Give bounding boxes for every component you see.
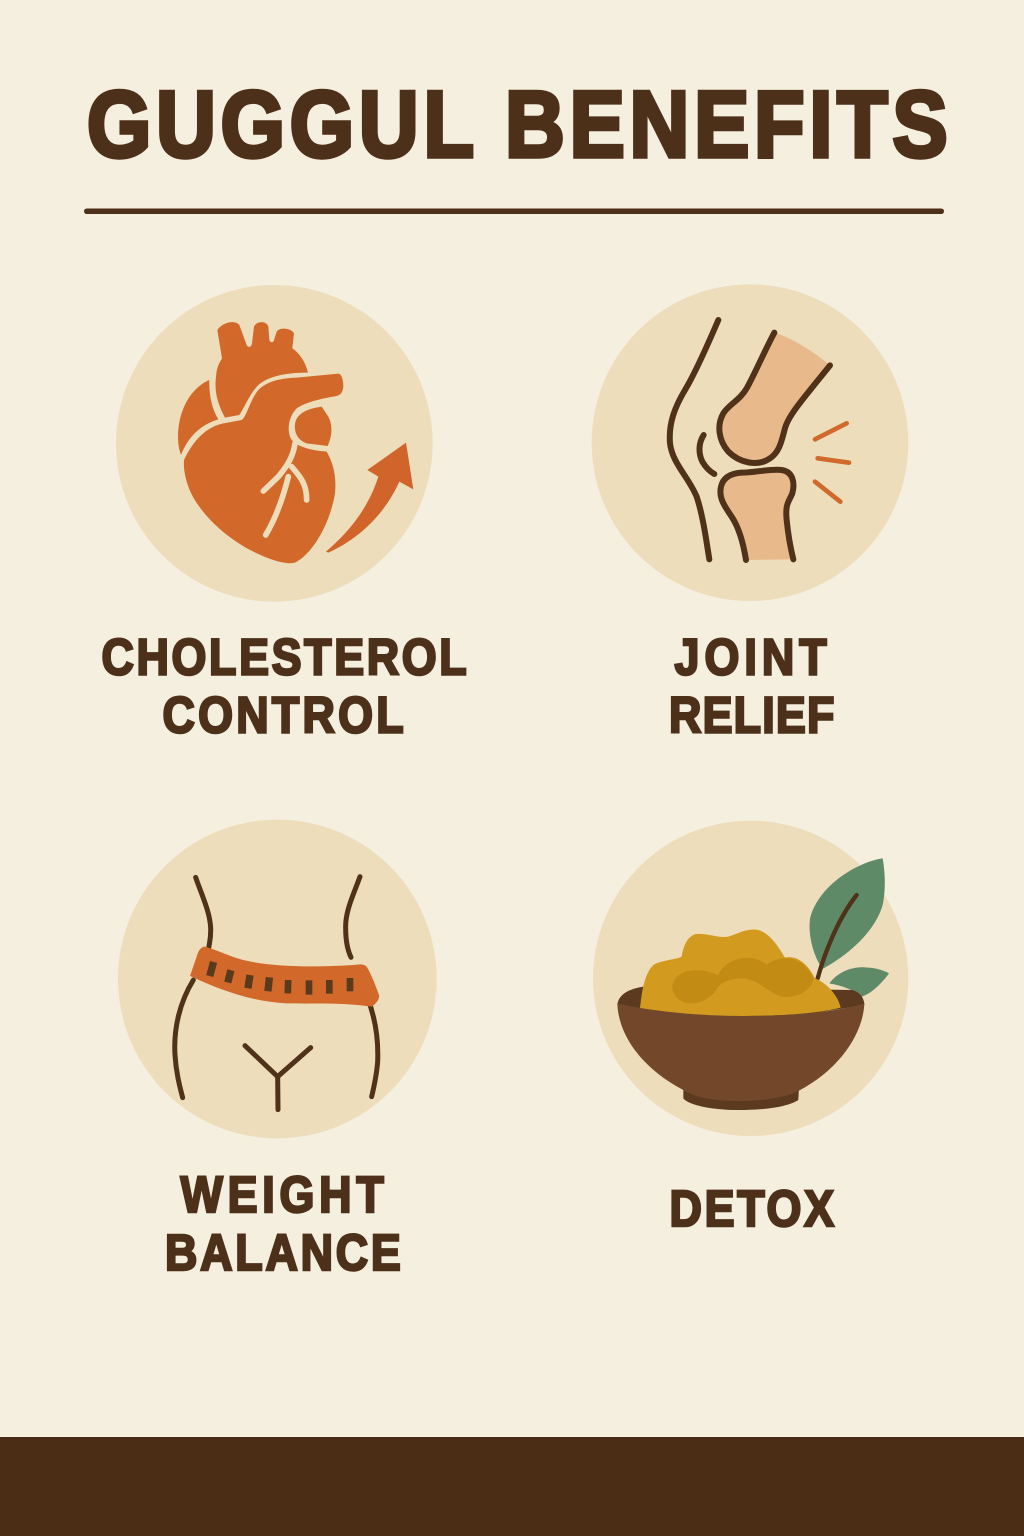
label: weight balance: WEIGHT [180, 1167, 384, 1224]
footer band [0, 1437, 1024, 1536]
label: joint relief: JOINT [674, 630, 827, 686]
title: GUGGUL BENEFITS [87, 72, 948, 177]
label: joint relief [669, 630, 834, 744]
arrow: rising [326, 443, 413, 553]
label: weight balance [165, 1167, 401, 1282]
icon: heart with rising arrow [116, 285, 433, 602]
icon: waist with measuring tape [118, 820, 437, 1138]
icon: leaves [810, 858, 889, 997]
panel: joint relief [592, 284, 908, 744]
label: cholesterol control: CHOLESTEROL [102, 630, 467, 686]
label: cholesterol control [102, 630, 467, 744]
label: weight balance: BALANCE [165, 1225, 401, 1282]
label: cholesterol control: CONTROL [162, 688, 404, 744]
icon: knee joint [592, 284, 908, 601]
icon: bowl [617, 929, 864, 1110]
icon: measuring tape [190, 947, 379, 1007]
title divider line [84, 208, 944, 214]
panel: weight balance [118, 820, 437, 1282]
icon: bowl of guggul with leaves [593, 821, 908, 1136]
icon: pain rays [815, 423, 849, 502]
panel: detox [593, 821, 908, 1238]
panel: cholesterol control [102, 285, 467, 744]
label: joint relief: RELIEF [669, 688, 834, 744]
heart [178, 322, 343, 563]
label: detox: DETOX [670, 1181, 834, 1238]
